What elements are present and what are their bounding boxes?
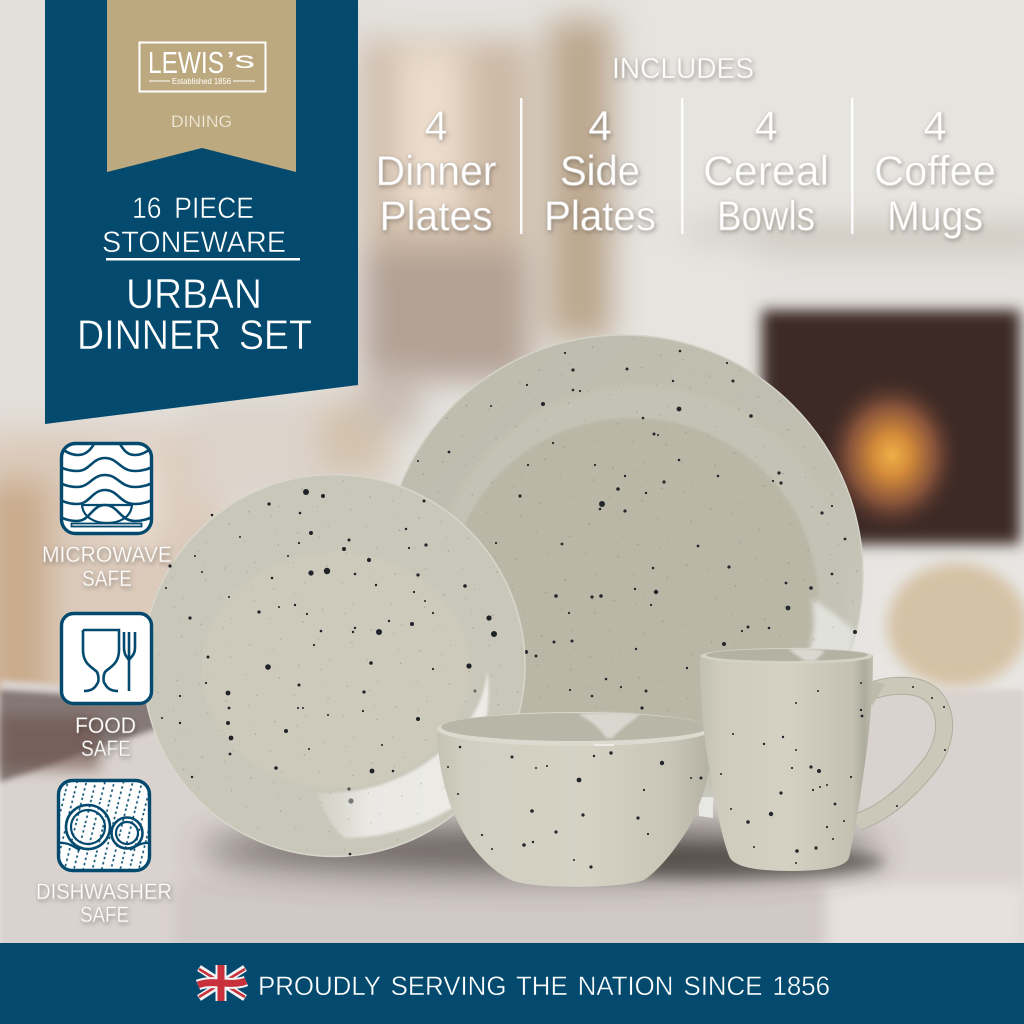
patch: white glare behind bowl bbox=[699, 797, 713, 818]
label: microwave safe: MICROWAVE bbox=[42, 542, 172, 567]
icon: microwave safe bbox=[57, 443, 155, 534]
includes: side plates: Plates bbox=[544, 192, 656, 239]
gold ribbon with logo bbox=[107, 0, 296, 172]
panel: navy banner bbox=[45, 0, 358, 424]
includes: coffee mugs: 4 bbox=[923, 102, 947, 149]
includes: dinner plates: Plates bbox=[380, 192, 492, 239]
speckles: side plate bbox=[161, 489, 497, 855]
label: dishwasher safe bbox=[36, 879, 172, 927]
includes: cereal bowls: Bowls bbox=[717, 192, 815, 239]
side plate bbox=[143, 474, 525, 856]
icon: union jack flag bbox=[198, 965, 246, 1001]
includes: coffee mugs: Mugs bbox=[887, 192, 983, 239]
includes heading: INCLUDES bbox=[612, 53, 754, 85]
includes: coffee mugs: Coffee bbox=[874, 147, 996, 194]
includes: side plates bbox=[544, 102, 656, 239]
speckles: dinner plate bbox=[417, 350, 857, 710]
mug handle bbox=[858, 680, 944, 822]
includes: cereal bowls: 4 bbox=[754, 102, 778, 149]
includes: dinner plates: 4 bbox=[424, 102, 448, 149]
speckles: mug bbox=[720, 682, 946, 864]
includes: coffee mugs bbox=[874, 102, 996, 239]
product title: 16 PIECE bbox=[132, 192, 254, 225]
logo: Lewis's bbox=[140, 42, 266, 92]
label: food safe bbox=[75, 713, 136, 761]
includes: dinner plates: Dinner bbox=[376, 147, 497, 194]
icon: dishwasher safe bbox=[58, 780, 150, 871]
label: dishwasher safe: DISHWASHER bbox=[36, 879, 172, 904]
icon: food safe bbox=[62, 614, 152, 704]
logo: Lewis's: Established 1856 bbox=[172, 76, 231, 86]
bowl bbox=[437, 712, 713, 887]
footer band bbox=[0, 943, 1024, 1024]
mug bbox=[700, 648, 946, 871]
label: microwave safe bbox=[42, 542, 172, 591]
label: microwave safe: SAFE bbox=[82, 566, 132, 591]
includes: cereal bowls: Cereal bbox=[703, 147, 829, 194]
product title bbox=[77, 192, 312, 358]
includes: side plates: Side bbox=[560, 147, 640, 194]
includes: cereal bowls bbox=[703, 102, 829, 239]
includes: side plates: 4 bbox=[588, 102, 612, 149]
logo: Lewis's: LEWIS bbox=[148, 45, 224, 80]
label: dining: DINING bbox=[171, 113, 232, 131]
label: food safe: FOOD bbox=[75, 713, 136, 738]
label: food safe: SAFE bbox=[81, 736, 131, 761]
dinner plate bbox=[383, 335, 863, 815]
product title: URBAN bbox=[126, 270, 262, 317]
footer slogan: PROUDLY SERVING THE NATION SINCE 1856 bbox=[258, 971, 830, 1001]
speckles: bowl bbox=[447, 746, 702, 869]
product title: STONEWARE bbox=[102, 226, 286, 259]
logo: Lewis's: ’s bbox=[226, 47, 255, 73]
label: dishwasher safe: SAFE bbox=[80, 902, 129, 927]
product title: DINNER SET bbox=[77, 311, 312, 358]
includes: dinner plates bbox=[376, 102, 497, 239]
